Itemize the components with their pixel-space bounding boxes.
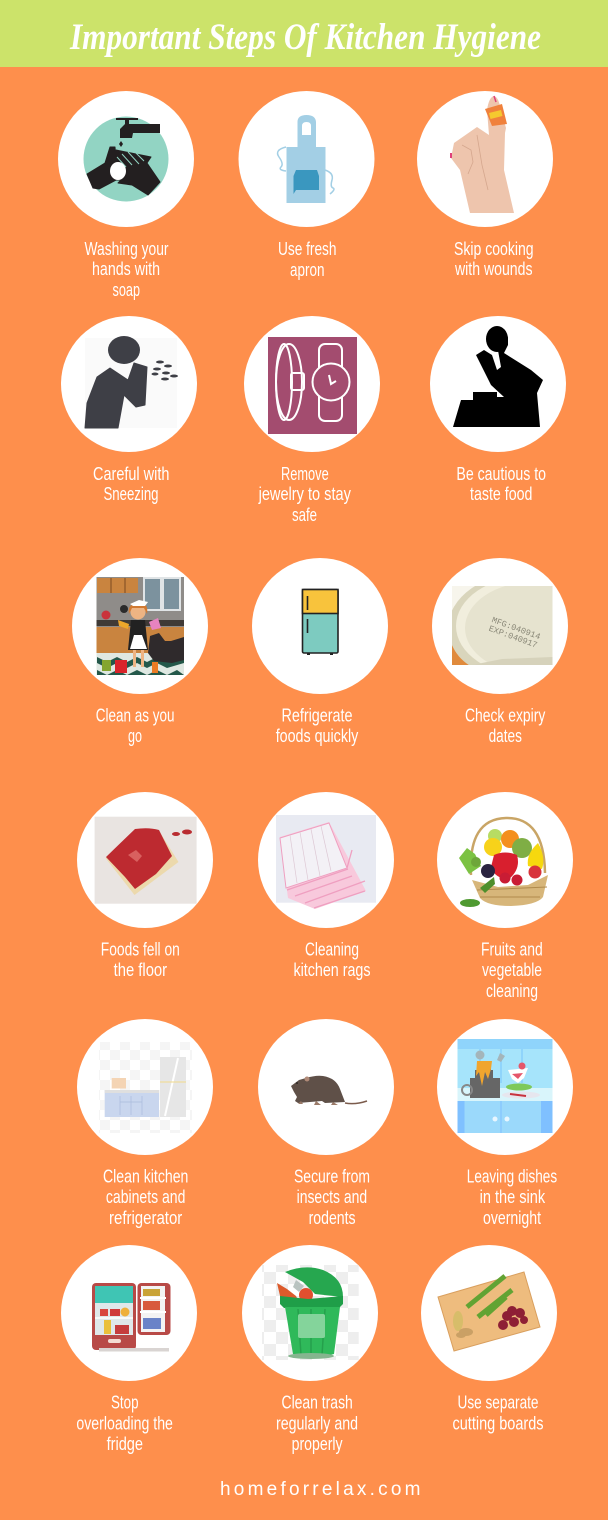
caption <box>103 1167 188 1228</box>
caption: Refrigerate <box>282 706 352 726</box>
panel: rags <box>258 792 394 980</box>
caption: go <box>128 726 142 746</box>
panel: dishes <box>437 1019 573 1228</box>
caption: Foods fell on <box>101 940 180 960</box>
icon: can lid with dates: MFG:040914 <box>490 615 542 642</box>
panel: cabinets <box>77 1019 213 1228</box>
caption: Clean as you <box>96 706 174 726</box>
caption: cutting boards <box>452 1414 544 1434</box>
caption: Use fresh <box>278 239 336 259</box>
icon: fruit basket <box>459 818 548 907</box>
caption: Remove <box>281 464 329 484</box>
icon: kitchen cabinets <box>99 1042 192 1133</box>
caption <box>481 940 543 1001</box>
panel: clean as you go <box>72 558 208 746</box>
panel: rodents <box>258 1019 394 1228</box>
panel: fruits <box>437 792 573 1001</box>
caption: with wounds <box>454 259 532 279</box>
caption: apron <box>290 260 324 280</box>
caption: overnight <box>483 1208 541 1228</box>
panel: fallen food <box>77 792 213 980</box>
icon: open fridge <box>92 1283 170 1352</box>
caption: Skip cooking <box>454 239 534 259</box>
caption: Be cautious to <box>456 464 546 484</box>
icon: bandaged finger <box>451 96 514 213</box>
caption: Washing your <box>84 239 168 259</box>
icon: rat <box>291 1076 367 1105</box>
panel: sneezing <box>61 316 197 504</box>
caption <box>96 706 174 746</box>
caption: taste food <box>470 484 532 504</box>
icon: sneezing person <box>85 336 178 428</box>
icon: apron <box>278 115 334 203</box>
caption: Check expiry <box>465 706 545 726</box>
caption <box>467 1167 557 1228</box>
icon: bracelet and watch <box>268 337 357 434</box>
caption <box>276 706 358 746</box>
caption <box>84 239 168 300</box>
icon: dishes in kitchen <box>458 1039 552 1133</box>
caption: soap <box>112 280 140 300</box>
caption: vegetable <box>482 960 542 980</box>
caption: refrigerator <box>109 1208 182 1228</box>
caption: Secure from <box>294 1167 370 1187</box>
caption <box>294 1167 370 1228</box>
icon: fridge <box>302 590 338 654</box>
panel: trash <box>242 1245 378 1454</box>
icon: cutting board with vegetables <box>438 1272 540 1351</box>
icon: green trash bin <box>262 1265 359 1360</box>
panel: washing hands <box>58 91 194 300</box>
caption: Clean kitchen <box>103 1167 188 1187</box>
caption: Clean trash <box>282 1392 353 1412</box>
caption: insects and <box>297 1187 367 1207</box>
panel: wounds <box>417 91 553 279</box>
caption: hands with <box>92 259 160 279</box>
caption <box>93 464 169 504</box>
caption: fridge <box>107 1434 143 1454</box>
icon: toast on floor <box>95 817 197 904</box>
icon: can lid with dates <box>452 586 552 665</box>
caption <box>278 239 336 280</box>
caption: Use separate <box>458 1392 538 1412</box>
panel: cutting boards <box>421 1245 557 1434</box>
caption: Sneezing <box>104 484 158 504</box>
caption: dates <box>489 726 522 746</box>
caption: regularly and <box>276 1414 358 1434</box>
icon: tasting silhouette <box>453 326 543 427</box>
caption: Stop <box>111 1392 138 1412</box>
caption: in the sink <box>480 1187 546 1207</box>
caption <box>76 1392 173 1454</box>
caption: jewelry to stay <box>258 484 351 504</box>
panel: fresh apron <box>238 91 374 280</box>
caption: properly <box>292 1434 343 1454</box>
footer website: homeforrelax.com <box>220 1479 420 1500</box>
caption: Leaving dishes <box>467 1167 557 1187</box>
caption: the floor <box>114 960 167 980</box>
icon: maid in messy kitchen <box>96 577 184 675</box>
icon: can lid with dates: EXP:040917 <box>487 624 539 651</box>
panel: refrigerate <box>252 558 388 746</box>
caption <box>276 1392 358 1454</box>
caption: overloading the <box>76 1414 173 1434</box>
caption: cabinets and <box>106 1187 185 1207</box>
caption <box>465 706 545 746</box>
caption <box>454 239 534 279</box>
caption: safe <box>292 505 317 525</box>
caption <box>101 940 180 980</box>
caption: rodents <box>309 1208 356 1228</box>
caption <box>452 1392 544 1434</box>
panel: expiry <box>432 558 568 742</box>
caption: foods quickly <box>276 726 358 746</box>
panel: jewelry <box>244 316 380 525</box>
caption: kitchen rags <box>294 960 370 980</box>
caption <box>456 464 546 504</box>
icon: hands under tap <box>84 116 168 202</box>
caption: Fruits and <box>481 940 543 960</box>
caption <box>258 464 351 525</box>
panel: tasting <box>430 316 566 504</box>
caption: Cleaning <box>305 940 359 960</box>
panel: overloaded fridge <box>61 1245 197 1454</box>
icon: stacked rags <box>276 815 376 909</box>
header banner <box>0 0 608 67</box>
caption <box>294 940 370 980</box>
caption: cleaning <box>486 981 538 1001</box>
caption: Careful with <box>93 464 169 484</box>
